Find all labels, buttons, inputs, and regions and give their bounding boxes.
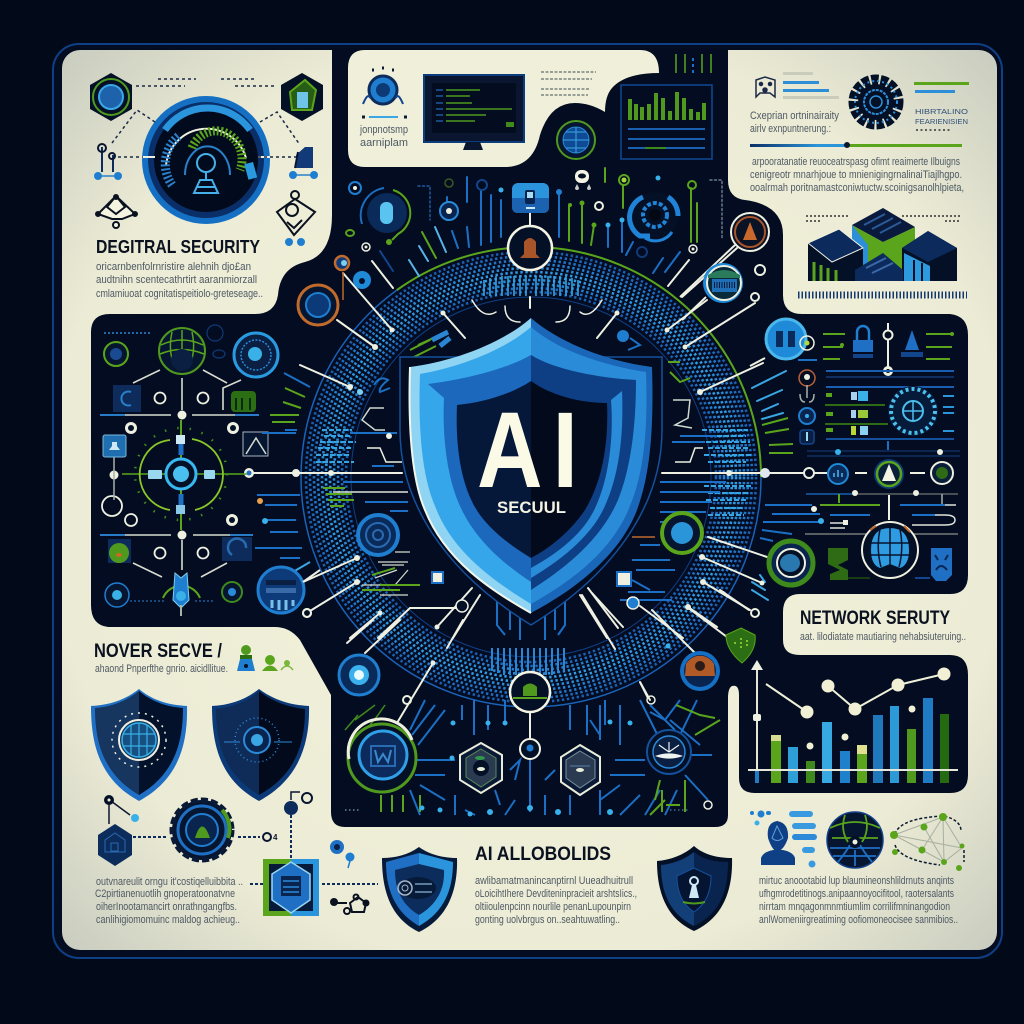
lower data lines [760, 494, 958, 541]
icon: analyst [750, 810, 817, 868]
caption: ahaond Pnperfthe gnrio. aicidllitue. [95, 663, 228, 675]
progress bar [750, 142, 962, 148]
icon: network gear [888, 386, 954, 436]
panel: digital security [90, 73, 323, 300]
radial connector lines [247, 248, 810, 723]
text block: top right [750, 156, 964, 194]
ring: dotted circular halo [301, 247, 761, 707]
caption: top centre: jonpnotsmp [359, 124, 408, 136]
icon: green ring [104, 342, 128, 366]
icon: left node link [94, 144, 122, 180]
text block: top right: arpooratanatie reuoceatrspasg ofimt reaimerte Ilbuigns [752, 156, 960, 168]
dashed connectors [112, 79, 300, 157]
icon: hexagon lock [98, 795, 139, 866]
icon: green globe [159, 328, 205, 374]
icon: node cluster: 4 [273, 833, 278, 842]
text block: digital security: audtnihn scentecathrtirt aaranmiorzall [96, 274, 257, 286]
heading: AI allobolids: AI ALLOBOLIDS [475, 844, 611, 865]
small icons: top left nodes [298, 176, 660, 325]
heading: top right: Cxeprian ortninairaity [750, 110, 839, 122]
data bits [826, 391, 868, 435]
side ticks [255, 373, 310, 572]
icon: globe shield [91, 689, 187, 801]
text block: digital security: oricarnbenfolrnristire alehnih djo£an [96, 261, 251, 273]
icon: fingerprint dial [142, 96, 270, 224]
panel: top centre [348, 50, 659, 167]
text block: bottom left: oiherInootamancirt onrathngangfbs. [96, 901, 237, 913]
icon: hexagon right [281, 73, 323, 121]
top row locks [823, 323, 954, 376]
icon: green shield [726, 628, 755, 663]
icon: blue tag [915, 548, 952, 581]
panel: cover section [91, 641, 378, 926]
inner circuit traces [323, 330, 726, 640]
caption: top centre: aarniplam [360, 137, 408, 149]
text block: AI allobolids: awlibamatmanincanptirnl Uueadhuitrull [475, 875, 633, 887]
panel: right circuit [750, 319, 960, 600]
text block: bottom right: anlWomeniirgreatiming oofiomoneocisee sanmibios.. [759, 914, 958, 926]
icon: green lens [769, 541, 813, 585]
icon: molecule right [277, 191, 315, 246]
icon: eye shield [212, 689, 309, 801]
heading: top right [750, 110, 839, 135]
icon: server blocks [806, 208, 961, 281]
icon: blue gear eye [630, 192, 678, 241]
bottom circuit board traces [345, 700, 720, 815]
text block: bottom left: canlihigiomomuinc maldog achieug.. [96, 914, 240, 926]
green top ticks [676, 54, 711, 73]
icon: ring node [403, 696, 411, 704]
icon: cog dial [172, 800, 232, 860]
icon: central target [122, 420, 247, 530]
top fan of short lines [372, 168, 722, 288]
icon: people [237, 645, 293, 671]
data lines [825, 371, 954, 424]
icon: green chip [231, 391, 256, 412]
text block: bottom right: ufhgmrodetitinogs.anipaannoyocifitool, raotersalants [759, 888, 954, 900]
icon: molecule bottom [331, 894, 368, 914]
icon: chip badge [348, 719, 416, 792]
icon: green-blue globe [827, 812, 883, 868]
text block: digital security: cmlamiuoat cognitatispeitiolo-greteseage.. [96, 288, 263, 300]
text block: bottom left [95, 876, 243, 926]
dashed links [133, 815, 378, 884]
text block: bottom left: C2pirtianenuotlih gnoperatoonatvne [95, 888, 235, 900]
heading: novel secure: NOVER SECVE / [94, 641, 223, 662]
text block: AI allobolids: gonting uolvbrgus on..seahtuwatling.. [475, 914, 620, 926]
shield title: AI: AI [477, 391, 578, 511]
text block: AI allobolids: oltiioulenpcinn nourlile penanLupounpirn [475, 901, 631, 913]
icon: network globe [862, 522, 918, 578]
panel: top right [750, 72, 969, 295]
panel: bottom right [750, 810, 964, 926]
text block: bottom right [759, 875, 958, 926]
icon: hex badge right [561, 745, 600, 795]
text block: bottom right: nirrtam mnqagonmnmtiumlim corrilifmninangodion [759, 901, 950, 913]
legend right: FEARIENISIEN [915, 119, 968, 126]
icon: keyboard badge [682, 263, 743, 320]
icon: triangle frame [243, 432, 268, 456]
text block: bottom right: mirtuc anoootabid lup blaumineonshlildrnuts anqints [759, 875, 954, 887]
icon: molecule left [96, 195, 137, 228]
icon: orange badge [508, 213, 552, 270]
icon: small pins [330, 840, 354, 868]
icon: hex badge left [460, 743, 502, 793]
icon: green bracket [828, 548, 870, 580]
text block: AI allobolids [475, 875, 637, 926]
icon: inner rings [358, 513, 702, 555]
icon: orange skull badge [680, 651, 720, 691]
text block: bottom left: outvnareulit orngu it'costiqelluibbita .. [96, 876, 243, 888]
icon: orange triangle badge [680, 213, 769, 297]
icon: blue shield [382, 847, 457, 932]
panel: top monitor chart [621, 85, 712, 159]
icon: bug emblem [362, 68, 407, 117]
text block: top right: ooalrmah poritnamastconiwtuctw.scoinigsanolhlpieta, [750, 182, 964, 194]
legend right [914, 82, 969, 130]
text block: AI allobolids: oLoicihtIhere Devditeninpracieit arshtsIics., [475, 888, 637, 900]
legend right: HIBRTALINO [915, 109, 969, 116]
tiny text rows [541, 72, 596, 95]
icon: cyan core ring [339, 655, 379, 695]
icon: blue compass badge [647, 730, 691, 774]
heading: top right: airlv exnpuntnerung.: [750, 123, 831, 135]
icon: keyhole shield [657, 846, 732, 931]
icon: robot head [575, 170, 591, 190]
icon: ring bottom right [704, 801, 712, 809]
icon: mouse dial [361, 188, 410, 245]
icon: chip tile [263, 859, 319, 916]
icon: hexagon left [90, 73, 132, 121]
shield subtitle: SECUUL [497, 498, 566, 517]
icon: glowing chip [234, 333, 278, 377]
column of small icons [798, 336, 817, 444]
icon: app tile [103, 435, 126, 500]
ring nodes on connectors [303, 265, 765, 617]
icon: circuit card [756, 77, 775, 97]
icon: big blue dial [258, 567, 304, 613]
icon: node cluster [263, 792, 312, 842]
text block: digital security [96, 261, 263, 300]
icon: loop node [640, 682, 655, 704]
legend bars [783, 72, 839, 99]
panel: network security [800, 608, 966, 643]
bottom-left icons [105, 537, 252, 616]
icon: lock tile [512, 183, 549, 213]
central dark circuit board [91, 46, 968, 827]
heading: digital security: DEGITRAL SECURITY [96, 237, 260, 257]
panel: AI allobolids [382, 844, 732, 932]
icon: green nodes [619, 175, 697, 253]
panel: left circuit [100, 325, 320, 617]
icon: green dome badge [510, 672, 550, 759]
caption: network security: aat. lilodiatate mautiaring nehabsiuteruing.. [800, 631, 966, 643]
barcode [798, 292, 967, 298]
node chain [760, 459, 953, 489]
icon: small globe [557, 121, 595, 159]
chart: network bars [748, 660, 958, 783]
text block: top right: cenigreotr mnarhjoue to mnienigingrnalinaiTiajlhgpo. [750, 169, 962, 181]
icon: blue pause badge [750, 319, 806, 366]
icon: monitor [424, 75, 524, 150]
heading: network security: NETWORK SERUTY [800, 608, 950, 629]
icon: right node link [289, 147, 318, 179]
icon: cog [854, 80, 898, 124]
icon: network mesh [890, 813, 964, 871]
shield: AI security [400, 318, 662, 625]
caption: top centre [359, 124, 408, 149]
icon: blue book [113, 385, 141, 412]
